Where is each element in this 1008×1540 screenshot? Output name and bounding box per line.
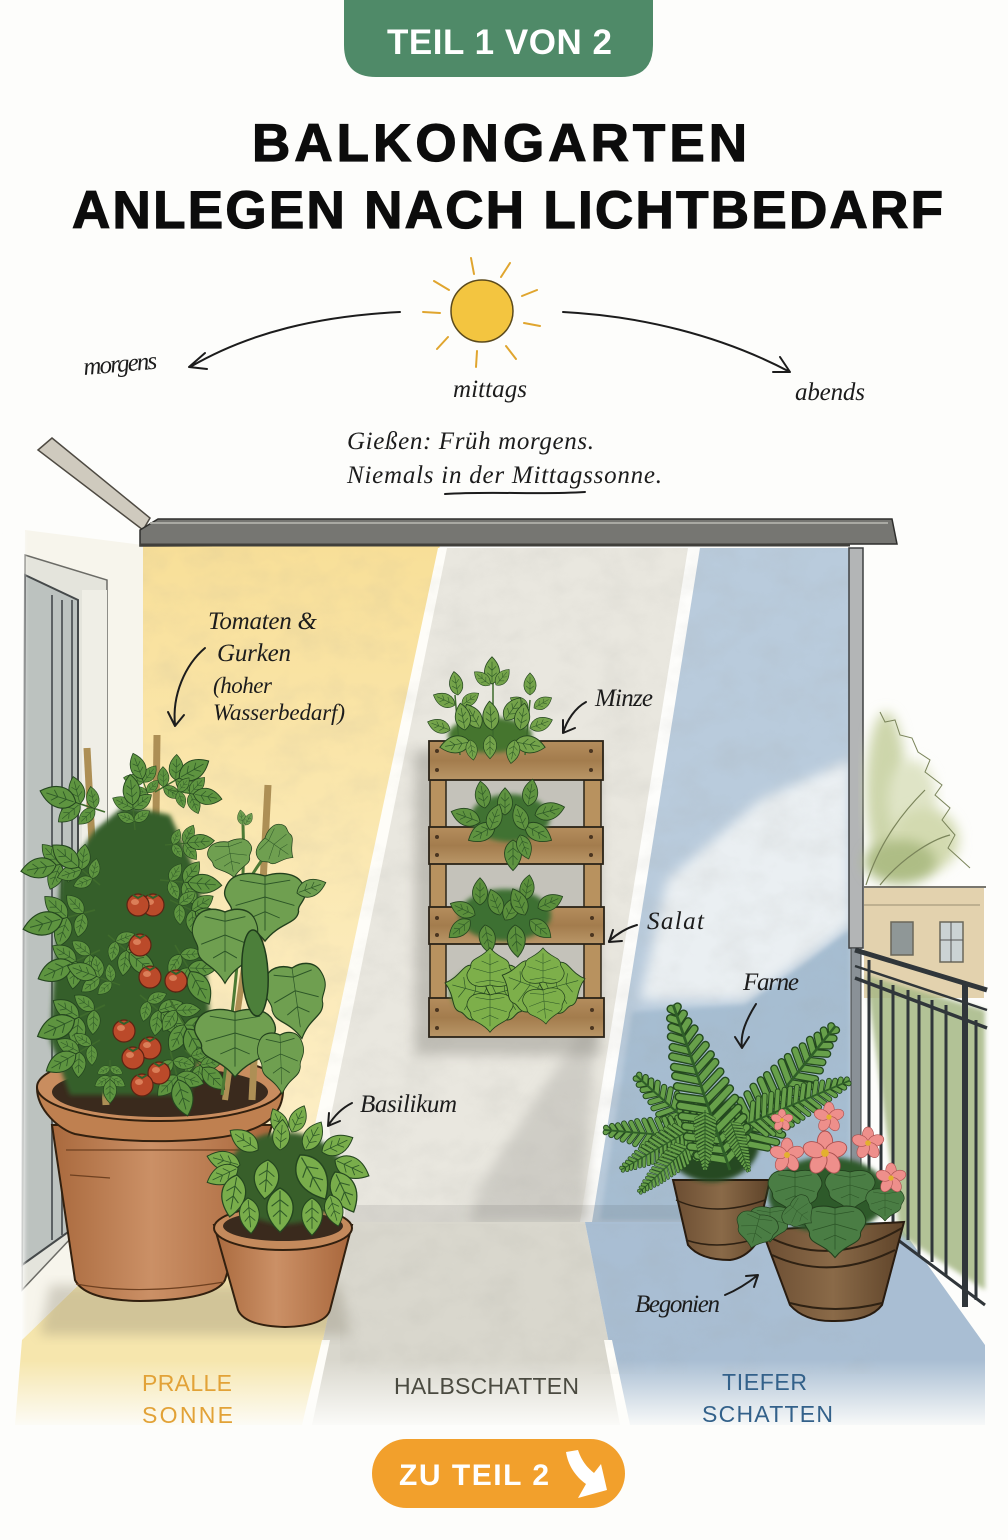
- callout: ferns: [735, 969, 799, 1048]
- railing: [855, 950, 987, 1307]
- background: building: [864, 887, 986, 998]
- plant: mint: [425, 657, 555, 765]
- arrow: sun path to evening: [563, 312, 790, 372]
- button: to part 2: ZU TEIL 2: [399, 1459, 549, 1492]
- floor stripe: [302, 1340, 330, 1425]
- label: abends: abends: [795, 379, 865, 406]
- plant: fern: [602, 995, 858, 1201]
- plant: cucumber: [192, 809, 332, 1095]
- icon: arrow down-right: [566, 1450, 607, 1498]
- note: watering advice: [346, 428, 662, 494]
- wall texture: [143, 548, 850, 1222]
- callout: tomatoes and cucumbers: Gurken: [217, 640, 291, 667]
- zone label: full sun: [142, 1370, 233, 1428]
- background: greenery behind railing: [866, 975, 985, 1290]
- plant: begonias: [731, 1102, 907, 1258]
- badge: Teil 1 von 2: [344, 0, 653, 77]
- zone label: partial shade: HALBSCHATTEN: [394, 1373, 579, 1399]
- left side wall with door: [0, 530, 143, 1410]
- label: mittags: mittags: [453, 376, 527, 403]
- stakes: [87, 735, 268, 1105]
- callout: salad: Salat: [647, 908, 705, 935]
- zone label: deep shade: [702, 1369, 833, 1427]
- plant: lower lettuce: [444, 874, 566, 958]
- label: morgens: morgens: [82, 348, 158, 381]
- callout: mint: Minze: [594, 685, 653, 712]
- callout: tomatoes and cucumbers: (hoher: [213, 673, 273, 698]
- roof gutter: [140, 519, 897, 546]
- small terracotta pot: [214, 1206, 352, 1327]
- icon: sun with rays: [423, 258, 540, 367]
- plant: tomatoes: [15, 739, 241, 1123]
- callout: tomatoes and cucumbers: [168, 608, 345, 726]
- roof edge on side wall: [38, 438, 150, 530]
- callout: basil: [328, 1091, 457, 1126]
- background: tree: [864, 712, 970, 885]
- callout: basil: Basilikum: [360, 1091, 457, 1118]
- wall shadow in partial shade: [470, 1010, 595, 1222]
- callout: mint: [563, 685, 653, 733]
- callout: salad: [609, 908, 705, 942]
- floor: sun: [15, 1222, 348, 1425]
- zone label: deep shade: SCHATTEN: [702, 1401, 833, 1427]
- callout: begonias: [635, 1275, 758, 1318]
- wall skirting: [345, 1205, 850, 1222]
- callout: tomatoes and cucumbers: Wasserbedarf): [213, 700, 345, 725]
- zone label: full sun: SONNE: [142, 1402, 233, 1428]
- badge: Teil 1 von 2: TEIL 1 VON 2: [387, 23, 612, 62]
- deep-shade lower wall: [600, 930, 850, 1220]
- button: to part 2: [372, 1439, 625, 1508]
- callout: ferns: Farne: [742, 969, 799, 996]
- plant: salad heads: [438, 948, 592, 1032]
- light patch on shaded wall: [640, 760, 850, 1000]
- floor shadow of pots: [40, 1285, 350, 1335]
- floor: deep shade: [585, 1222, 985, 1425]
- callout: tomatoes and cucumbers: Tomaten &: [208, 608, 318, 635]
- title: [72, 114, 943, 240]
- floor stripe: [604, 1340, 630, 1425]
- callout: begonias: Begonien: [635, 1291, 720, 1318]
- arrow: sun path to morning: [189, 312, 400, 369]
- balcony scene: [0, 438, 1008, 1430]
- wooden pallet planter: [415, 657, 604, 1055]
- deep shade zone wall: [585, 548, 850, 1222]
- downpipe: [849, 548, 863, 1168]
- zone label: full sun: PRALLE: [142, 1370, 232, 1396]
- floor texture: [340, 1224, 880, 1374]
- title: ANLEGEN NACH LICHTBEDARF: [72, 181, 943, 240]
- title: BALKONGARTEN: [252, 114, 747, 173]
- note: watering advice: Niemals in der Mittagssonne.: [346, 462, 662, 489]
- light stripe: [580, 548, 700, 1222]
- sun zone wall: [143, 545, 440, 1222]
- plant: upper lettuce: [448, 778, 567, 871]
- fern pot: [673, 1180, 770, 1260]
- big terracotta pot: [37, 1053, 283, 1301]
- light stripe: [300, 548, 447, 1222]
- note: watering advice: Gießen: Früh morgens.: [347, 428, 594, 455]
- partial shade zone wall: [328, 548, 697, 1222]
- floor: partial shade: [305, 1222, 625, 1425]
- floor fade: [0, 1360, 1008, 1430]
- plant: basil: [203, 1102, 373, 1235]
- begonia pot: [762, 1222, 904, 1321]
- zone label: deep shade: TIEFER: [722, 1369, 807, 1395]
